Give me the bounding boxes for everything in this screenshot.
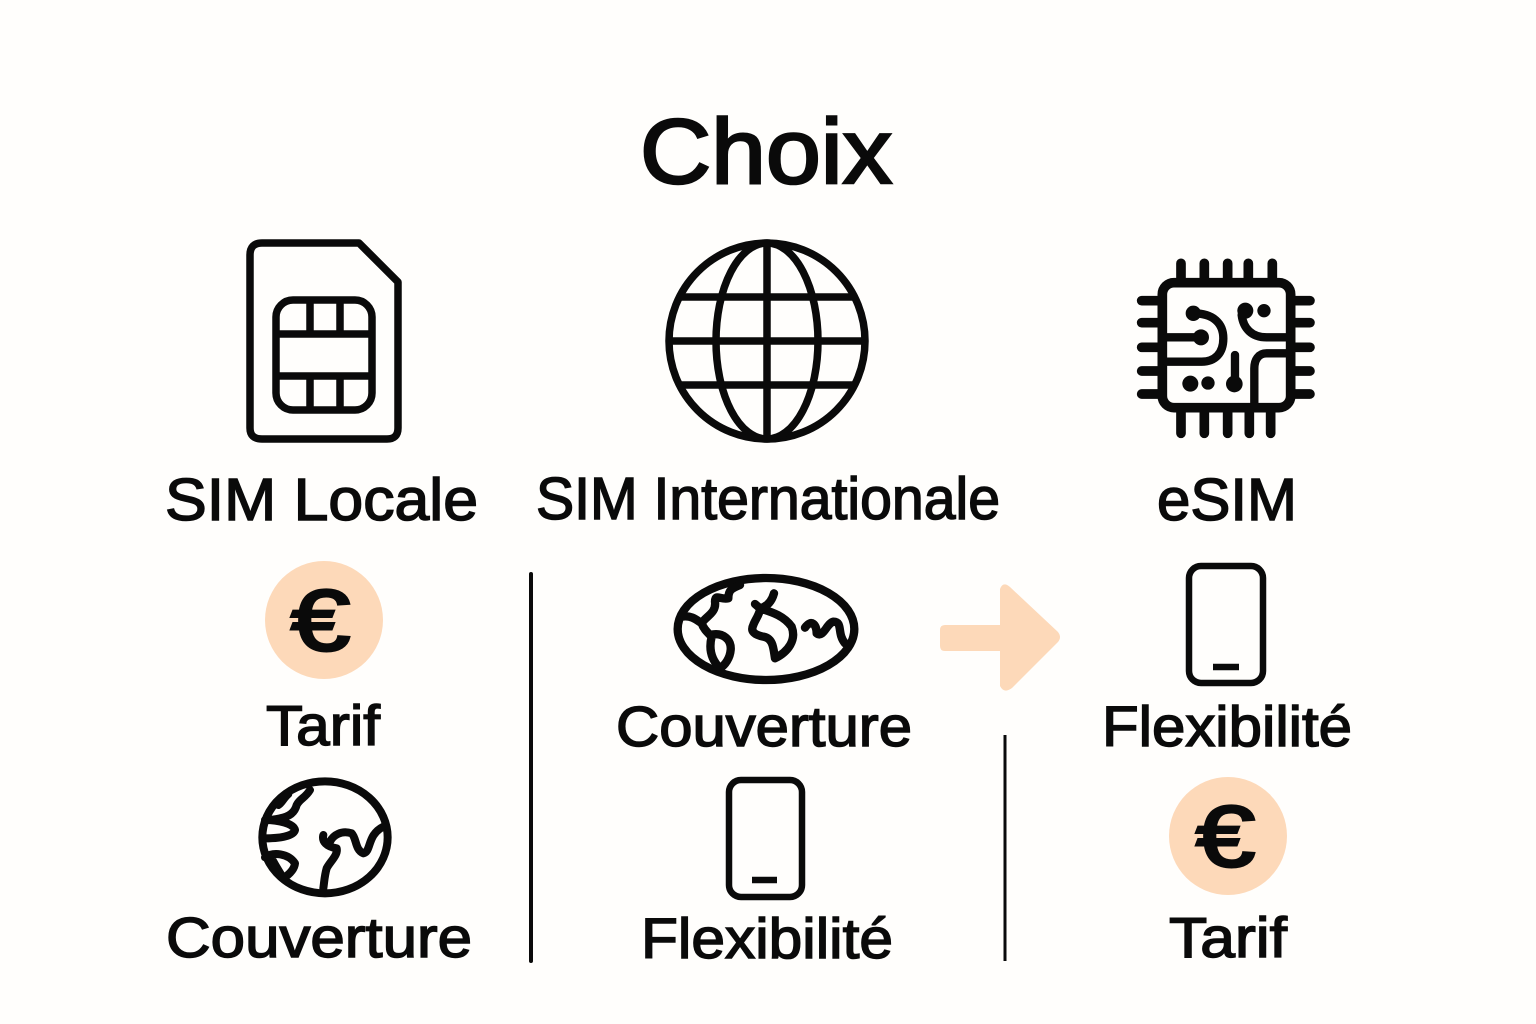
icon: world map, international SIM xyxy=(678,578,854,680)
label: SIM Internationale: SIM Internationale xyxy=(536,466,1000,532)
divider xyxy=(529,574,533,961)
icon: globe xyxy=(669,243,865,439)
icon: SIM card xyxy=(250,243,398,439)
icon: euro, local SIM xyxy=(265,561,383,679)
icon: euro, eSIM: € xyxy=(1196,789,1255,885)
label: Flexibilité, international SIM: Flexibilité xyxy=(641,907,893,971)
icon: eSIM chip xyxy=(1142,263,1310,433)
icon: phone, eSIM xyxy=(1189,566,1263,683)
label: SIM Locale: SIM Locale xyxy=(165,467,478,533)
label: Flexibilité, eSIM: Flexibilité xyxy=(1102,695,1352,759)
label: Tarif, eSIM: Tarif xyxy=(1169,906,1287,970)
icon: euro, local SIM: € xyxy=(291,573,350,669)
label: Couverture, local SIM: Couverture xyxy=(166,906,472,970)
title: Choix xyxy=(640,101,892,203)
icon: phone, international SIM xyxy=(729,780,802,897)
icon: euro, eSIM xyxy=(1169,777,1287,895)
label: eSIM: eSIM xyxy=(1157,467,1297,533)
label: Couverture, international SIM: Couverture xyxy=(616,695,912,759)
arrow xyxy=(940,584,1060,691)
divider xyxy=(1004,735,1006,961)
label: Tarif, local SIM: Tarif xyxy=(266,694,380,758)
icon: world map, local SIM xyxy=(262,781,388,893)
